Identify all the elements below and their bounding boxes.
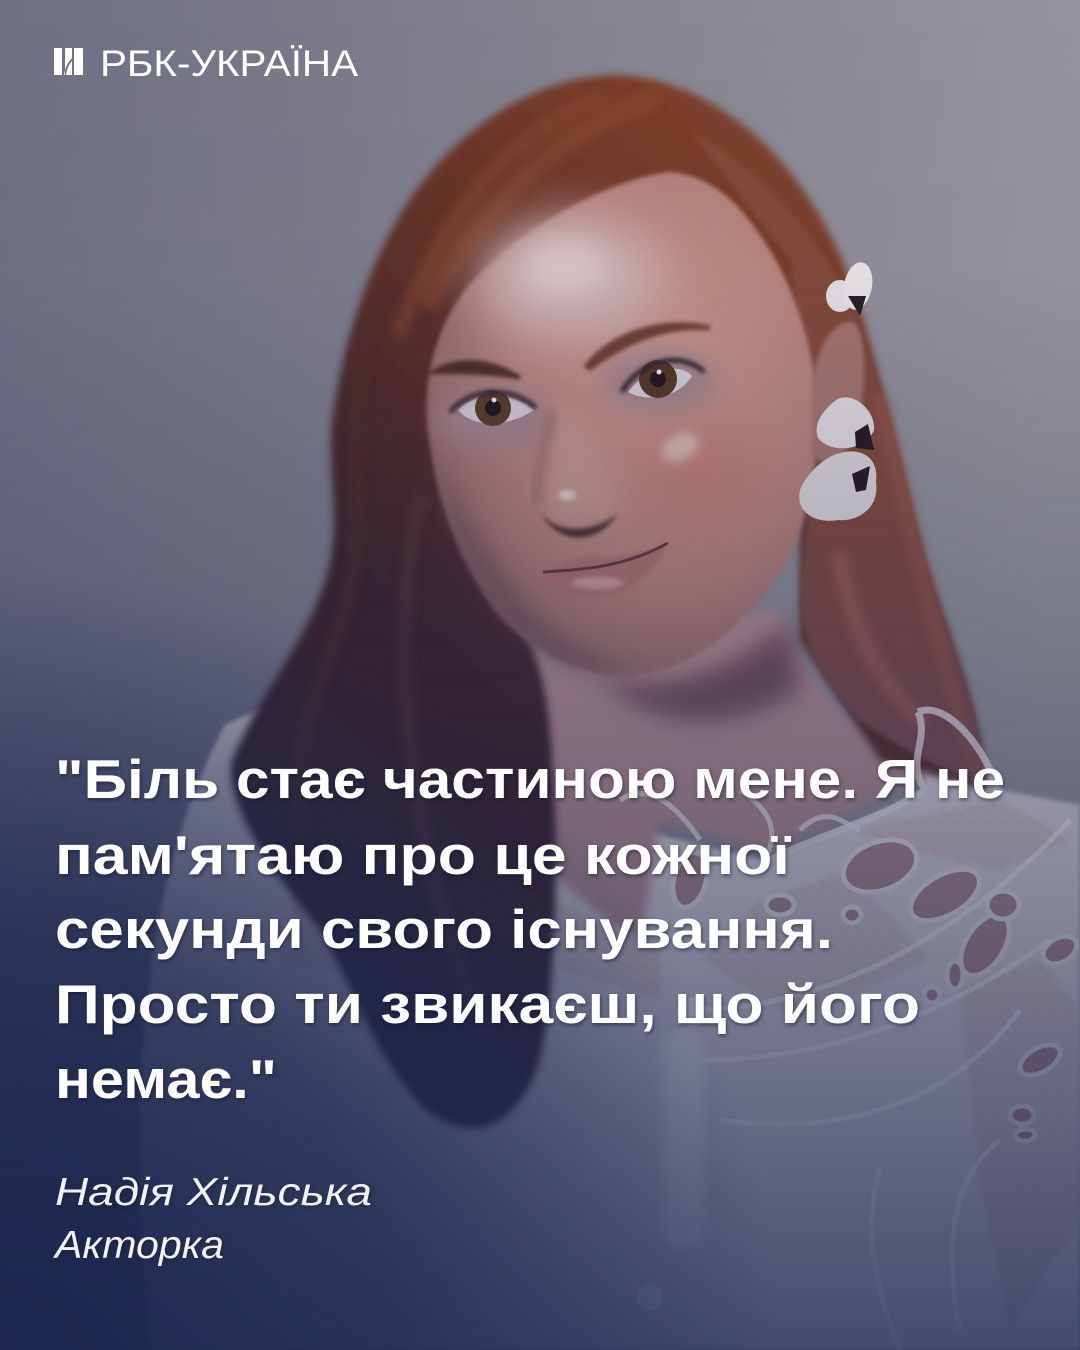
lace rib lines (620, 790, 1070, 1350)
lace collar scallop (770, 710, 1000, 860)
cheek highlight (656, 426, 704, 468)
quote text: пам'ятаю про це кожної (55, 824, 792, 886)
quote text (55, 748, 1005, 1110)
quote text: Просто ти звикаєш, що його (55, 973, 920, 1035)
attribution (53, 1171, 372, 1267)
attribution: Акторка (53, 1224, 224, 1267)
logo mark (54, 48, 83, 75)
logo text: РБК-УКРАЇНА (100, 43, 358, 84)
lace openings (667, 830, 1080, 1141)
eyebrows (433, 362, 520, 378)
eye left (439, 388, 551, 452)
lips (543, 543, 668, 597)
nose (537, 400, 619, 538)
face (427, 172, 818, 676)
hair (231, 75, 985, 1128)
quote text: "Біль стає частиною мене. Я не (55, 748, 1005, 810)
lace mesh areas (280, 800, 1080, 1330)
chest skin (430, 610, 925, 950)
quote text: секунди свого існування. (55, 898, 833, 960)
forehead highlight (478, 218, 662, 342)
hair strands (298, 100, 975, 1000)
logo (54, 43, 358, 84)
earring top (826, 260, 876, 316)
eye right (600, 350, 720, 414)
ear (811, 322, 864, 462)
attribution: Надія Хільська (55, 1171, 372, 1214)
lace blouse (139, 610, 1080, 1350)
quote text: немає." (55, 1048, 277, 1110)
button column (637, 997, 707, 1311)
earring bottom (799, 397, 876, 521)
jaw shadow (430, 445, 640, 676)
cheek blush (630, 415, 770, 535)
